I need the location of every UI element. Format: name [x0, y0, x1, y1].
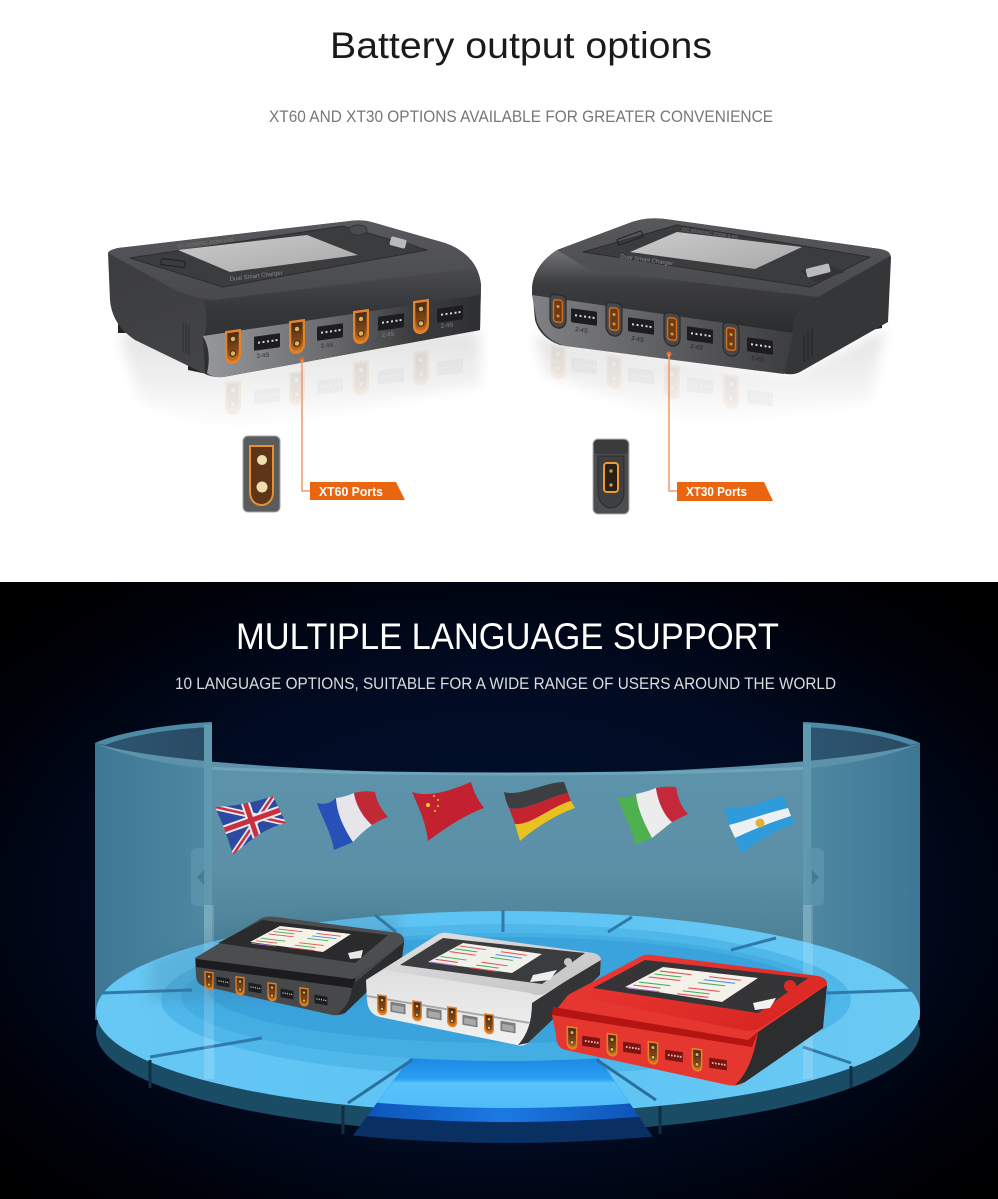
charger: black with XT60 ports: 2-4S [257, 352, 270, 360]
label: XT60 ports: XT60 Ports [319, 485, 383, 499]
platform segment gaps [101, 910, 915, 1134]
charger: black with XT30 ports: DC 500W/AC 200W 2-6S [682, 227, 739, 241]
label: XT30 ports: XT30 Ports [686, 485, 747, 499]
platform inner step [161, 924, 851, 1076]
glass cylinder back [95, 722, 920, 1024]
charger: black with XT30 ports [532, 218, 891, 374]
flag: United Kingdom [215, 796, 286, 855]
charger: black with XT60 ports [108, 220, 481, 377]
charger reflection: right [535, 330, 885, 425]
charger: black small [195, 917, 404, 1015]
charger: black with XT30 ports: 2-4S [690, 344, 703, 352]
subtitle: XT60 and XT30: XT60 AND XT30 OPTIONS AVAILABLE FOR GREATER CONVENIENCE [269, 107, 773, 126]
platform top ring [96, 911, 920, 1113]
charger: red small [552, 955, 827, 1086]
side tab: right [806, 848, 824, 906]
charger: white small [366, 933, 601, 1046]
dark background panel [0, 582, 998, 1199]
title: battery output options: Battery output options [330, 25, 712, 66]
charger: black with XT30 ports: 2-4S [751, 356, 764, 364]
subheading: 10 language options: 10 LANGUAGE OPTIONS, SUITABLE FOR A WIDE RANGE OF USERS AROUND THE WORLD [175, 674, 836, 693]
inset icon: XT60 port closeup [243, 436, 280, 512]
charger: black with XT60 ports: 2-4S [382, 331, 395, 339]
platform inner core [208, 937, 804, 1043]
platform inner recess [181, 933, 831, 1061]
glass cylinder front highlights [150, 905, 813, 1079]
flag: Argentina [724, 796, 795, 854]
charger: black with XT60 ports: DC 500W/AC 200W 2-6S [178, 237, 235, 250]
label: XT60 ports [310, 482, 405, 500]
flag: France [317, 791, 388, 850]
flag: Italy [617, 787, 688, 845]
charger: black with XT60 ports: 2-4S [441, 322, 454, 330]
charger: black with XT60 ports: 2-4S [321, 342, 334, 350]
white background panel [0, 0, 998, 582]
charger: black with XT30 ports: Dual Smart Charger [620, 254, 673, 267]
charger: black with XT60 ports: Dual Smart Charger [230, 271, 283, 283]
label: XT30 ports [677, 482, 773, 501]
platform front segment [353, 1058, 653, 1143]
flag: Germany [504, 782, 575, 841]
callout line: XT30 [666, 352, 678, 491]
charger: black with XT30 ports: 2-4S [575, 327, 588, 335]
charger: black with XT30 ports: 2-4S [631, 336, 644, 344]
flag: China [412, 782, 484, 841]
heading: multiple language support: MULTIPLE LANGUAGE SUPPORT [236, 616, 779, 657]
side tab: left [191, 848, 209, 906]
callout line: XT60 [300, 358, 311, 491]
inset icon: XT30 port closeup [593, 439, 629, 514]
platform side [96, 931, 920, 1133]
charger reflection: left [120, 332, 480, 430]
platform [96, 900, 920, 1143]
